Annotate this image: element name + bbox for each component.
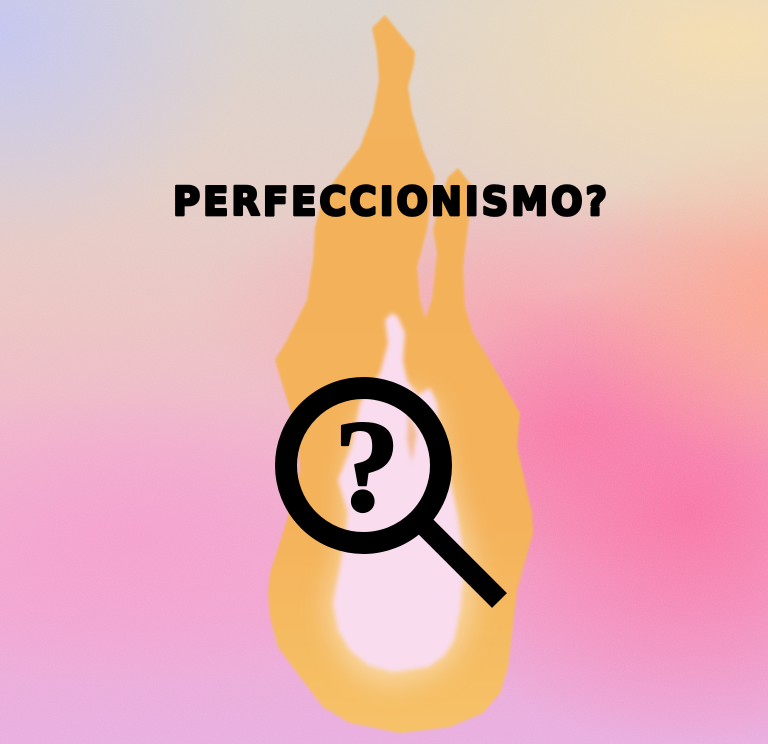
title: PERFECCIONISMO? [173, 179, 607, 225]
icon: glow around inner flame [326, 390, 475, 685]
icon: orange flame [268, 15, 533, 733]
illustration: flame with magnifying glass and title [175, 14, 606, 734]
icon: pale inner flame [333, 313, 463, 672]
icon: magnifying glass [286, 388, 500, 600]
question mark: ? [334, 394, 400, 539]
